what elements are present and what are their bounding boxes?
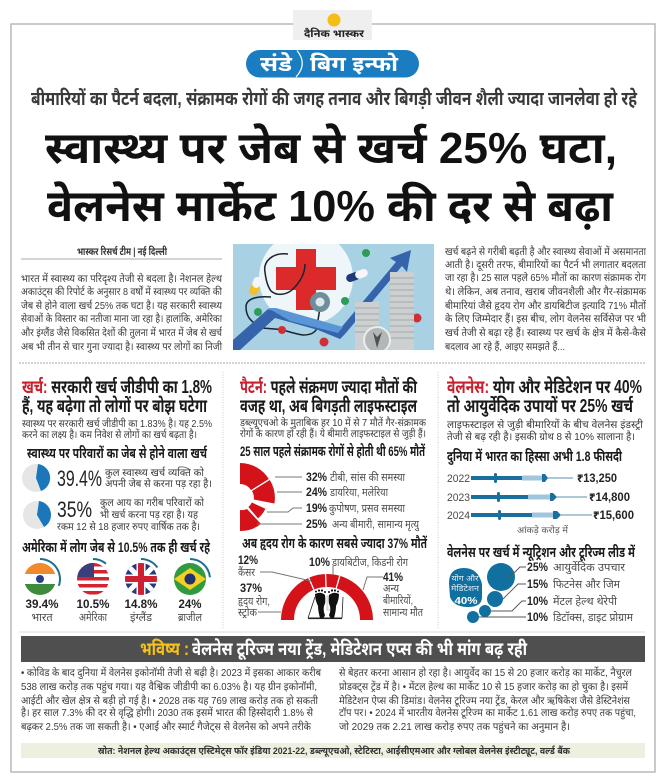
syringe chart: 2023: 2023: [447, 492, 470, 504]
bubble chart: wellness spending: 15%: [527, 577, 548, 591]
fan chart: causes 25 years ago: 32%: [306, 470, 327, 484]
pie chart: 39.4 percent: कुल स्वास्थ्य खर्च व्यक्ति को: [105, 466, 204, 479]
future text left column: 538 लाख करोड़ तक पहुंच गया। यह वैश्विक जीडीपी का 6.03% है। यह ग्रीन इकोनॉमी,: [21, 680, 317, 694]
syringe chart: 2024: ₹15,600: [593, 508, 634, 522]
bubble chart: wellness spending: 10%: [527, 610, 548, 624]
intro text left: सेवाओं के विस्तार का नतीजा माना जा रहा है। हालांकि, अमेरिका: [21, 312, 222, 325]
icon: Brazil flag: ब्राजील: [178, 611, 202, 624]
fan chart: causes 25 years ago: 25%: [306, 517, 327, 531]
intro text left: जेब से होने वाला खर्च 25% तक घटा है। यह सरकारी स्वास्थ्य: [21, 299, 223, 312]
subheading: household spending: स्वास्थ्य पर परिवारों का जेब से होने वाला खर्च: [27, 444, 208, 461]
fan chart: causes 25 years ago: [240, 463, 420, 531]
pie chart: 35 percent: रकम 12 से 18 हजार रुपए वार्षिक तक है।: [57, 520, 200, 533]
bubble chart: wellness spending: योग और: [452, 574, 479, 583]
future text right column: जो 2029 तक 2.21 लाख करोड़ रुपए तक पहुंचने का अनुमान है।: [339, 720, 570, 734]
semi-donut chart: causes now: कैंसर: [238, 566, 255, 579]
icon: stethoscope: [246, 254, 320, 335]
semi-donut chart: causes now: 37%: [240, 581, 262, 595]
section badge: बिग इन्फो: [310, 52, 399, 76]
bubble chart: wellness spending: [449, 560, 633, 624]
bubble chart: wellness spending: 40%: [454, 596, 478, 607]
syringe chart: 2024: [447, 508, 634, 522]
intro text right: थे। लेकिन, अब तनाव, खराब जीवनशैली और गैर-संक्रामक: [445, 285, 647, 298]
source bar: स्रोत: नेशनल हेल्थ अकाउंट्स एस्टिमेट्स फॉर इंडिया 2021-22, डब्ल्यूएचओ, स्टेटिस्टा, आईसीएमआर और ग्लोबल वेलनेस इंस्टीट्यूट, वर्ल्ड बैंक: [98, 744, 571, 757]
spending summary: [22, 417, 212, 441]
fan chart: causes 25 years ago: 24%: [306, 485, 327, 499]
syringe chart: 2024: 2024: [447, 510, 470, 522]
future text right column: से बेहतर करना आसान हो रहा है। आयुर्वेद का 15 से 20 हजार करोड़ का मार्केट, नैचुरल: [339, 666, 633, 679]
pie chart: 35 percent: 35%: [57, 497, 92, 522]
panel: spending: [22, 376, 212, 624]
future text right column: [339, 666, 636, 734]
section badge: संडे: [260, 52, 293, 76]
fan chart: causes 25 years ago: अन्य बीमारी, सामान्य मृत्यु: [332, 518, 420, 531]
syringe chart: 2022: ₹13,250: [577, 471, 617, 485]
intro text right: [445, 245, 647, 353]
wellness summary: लाइफस्टाइल से जुड़ी बीमारियों के बीच वेलनेस इंडस्ट्री: [447, 418, 643, 431]
main title: स्वास्थ्य पर जेब से खर्च 25% घटा,: [45, 122, 617, 173]
icon: coin stacks: [355, 272, 414, 353]
future text left column: बढ़कर 2.5% तक जा सकती है। • एआई और स्मार्ट गैजेट्स से वेलनेस को अपने तरीके: [21, 720, 312, 733]
heading: spending: [22, 376, 212, 416]
semi-donut chart: causes now: [238, 553, 424, 620]
pie chart: 39.4 percent: अपनी जेब से करना पड़ रहा है।: [105, 477, 212, 490]
icon: India flag: भारत: [31, 612, 53, 624]
future text left column: आईटी और खेल क्षेत्र से बड़ी हो गई है। • 2028 तक यह 769 लाख करोड़ तक हो सकती: [21, 694, 318, 707]
main title: [45, 122, 617, 231]
future text left column: [21, 666, 322, 733]
icon: pills: [248, 268, 369, 296]
wellness summary: [447, 418, 643, 443]
intro text left: भारत में स्वास्थ्य का परिदृश्य तेजी से बदला है। नेशनल हेल्थ: [21, 272, 222, 285]
bubble chart: wellness spending: मेडिटेशन: [451, 584, 480, 593]
pattern summary: [239, 416, 427, 440]
icon: USA flag: [76, 559, 110, 624]
icon: UK flag: 14.8%: [124, 597, 158, 611]
fan chart: causes 25 years ago: कुपोषण, प्रसव समस्या: [329, 502, 405, 515]
intro text right: बीमारियां जैसे हृदय रोग और डायबिटीज इत्यादि 71% मौतों: [445, 299, 646, 312]
semi-donut chart: causes now: 10%: [309, 555, 330, 569]
bubble chart: wellness spending: 25%: [527, 560, 548, 574]
semi-donut chart: causes now: बीमारियों,: [383, 594, 413, 607]
syringe chart: 2023: [447, 490, 630, 504]
section badge: [246, 50, 419, 78]
heading: pattern: वजह था, अब बिगड़ती लाइफस्टाइल: [240, 396, 418, 416]
future text right column: प्रोडक्ट्स ट्रेंड में है। • मेंटल हेल्थ का मार्केट 10 से 15 हजार करोड़ का हो चुका है। इसमें: [339, 680, 629, 693]
subheading: infectious deaths: 25 साल पहले संक्रामक रोगों से होती थी 65% मौतें: [240, 442, 426, 459]
syringe chart: 2022: [447, 471, 617, 485]
chart note: आंकड़े करोड़ में: [517, 524, 569, 536]
semi-donut chart: causes now: हृदय रोग,: [238, 595, 270, 608]
pattern summary: रोगों के कारण हो रही हैं। ये बीमारी लाइफस्टाइल से जुड़ी हैं।: [240, 427, 426, 440]
icon: Brazil flag: 24%: [178, 597, 202, 611]
icon: USA flag: 10.5%: [76, 597, 110, 611]
future text right column: टॉप पर। • 2024 में भारतीय वेलनेस टूरिज्म का मार्केट 1.61 लाख करोड़ रुपए तक पहुंचा,: [339, 706, 636, 720]
semi-donut chart: causes now: 41%: [383, 570, 403, 584]
intro text right: बदलाव आ रहे हैं, आइए समझते हैं...: [445, 340, 565, 353]
panel: pattern: [238, 376, 428, 620]
future text right column: मेडिटेशन ऐप्स की डिमांड। वेलनेस टूरिज्म नया ट्रेंड, केरल और ऋषिकेश जैसे डेस्टिनेशंस: [339, 694, 631, 708]
source bar: [21, 743, 645, 758]
subheading: America comparison: अमेरिका में लोग जेब से 10.5% तक ही खर्च रहे: [22, 538, 211, 555]
bubble chart: wellness spending: मेंटल हेल्थ थेरेपी: [553, 595, 617, 608]
bubble chart: wellness spending: डिटॉक्स, डाइट प्रोग्राम: [553, 611, 633, 624]
pie chart: 35 percent: भी खर्च करना पड़ रहा है। यह: [100, 508, 198, 521]
semi-donut chart: causes now: 12%: [238, 553, 258, 567]
bubble chart: wellness spending: 10%: [527, 594, 548, 608]
bubble chart: wellness spending: फिटनेस और जिम: [553, 578, 620, 591]
illustration: health and money: [233, 244, 434, 350]
icon: UK flag: इंग्लैंड: [130, 611, 152, 624]
intro text right: के लिए जिम्मेदार हैं। इस बीच, लोग वेलनेस सर्विसेज पर भी: [445, 312, 646, 325]
icon: UK flag: [124, 559, 158, 624]
spending summary: स्वास्थ्य पर सरकारी खर्च जीडीपी का 1.83% है। यह 2.5%: [22, 417, 212, 430]
wellness summary: तेजी से बढ़ रही है। इसकी ग्रोथ 8 से 10% सालाना है।: [447, 430, 635, 443]
subheading: heart disease deaths: अब हृदय रोग के कारण सबसे ज्यादा 37% मौतें: [242, 534, 428, 551]
heading: wellness: [447, 377, 642, 417]
spending summary: करने का लक्ष्य है। कम निवेश से लोगों का खर्च बढ़ता है।: [22, 428, 197, 441]
semi-donut chart: causes now: डायबिटीज, किडनी रोग: [331, 556, 409, 569]
masthead logo: [293, 10, 372, 40]
intro text right: आती है। दूसरी तरफ, बीमारियों का पैटर्न भी लगातार बदलता: [445, 258, 646, 272]
pie chart: 39.4 percent: 39.4%: [57, 466, 102, 491]
fan chart: causes 25 years ago: टीबी, सांस की समस्या: [330, 471, 405, 484]
intro text left: अकाउंट्स की रिपोर्ट के अनुसार 8 वर्षों में स्वास्थ्य पर व्यक्ति की: [21, 285, 222, 298]
pattern summary: डब्ल्यूएचओ के मुताबिक हर 10 में से 7 मौतें गैर-संक्रामक: [239, 416, 427, 430]
heading: pattern: पैटर्न: पहले संक्रमण ज्यादा मौतों की: [240, 376, 417, 397]
pie chart: 39.4 percent: [22, 464, 212, 492]
intro text left: और इंग्लैंड जैसे विकसित देशों की तुलना में भारत में जेब से खर्च: [21, 326, 223, 339]
intro text left: [21, 272, 223, 353]
syringe chart: 2023: ₹14,800: [589, 490, 630, 504]
icon: India flag: 39.4%: [26, 597, 59, 611]
semi-donut chart: causes now: अन्य: [383, 583, 400, 595]
icon: rising arrow: [233, 250, 411, 350]
heading: spending: खर्च: सरकारी खर्च जीडीपी का 1.8%: [22, 376, 212, 397]
future text left column: • कोविड के बाद दुनिया में वेलनेस इकोनॉमी तेजी से बढ़ी है। 2023 में इसका आकार करीब: [21, 666, 322, 680]
pie chart: 35 percent: कुल आय का गरीब परिवारों को: [100, 496, 204, 509]
future text left column: है। हर साल 7.3% की दर से वृद्धि होगी। 2030 तक इसमें भारत की हिस्सेदारी 1.8% से: [21, 706, 314, 719]
pie chart: 35 percent: [23, 496, 204, 533]
banner: future: [21, 636, 645, 662]
intro text right: खर्च तेजी से बढ़ा रहे हैं। स्वास्थ्य पर खर्च के क्षेत्र में कैसे-कैसे: [445, 326, 647, 339]
semi-donut chart: causes now: स्ट्रोक: [238, 606, 257, 619]
banner: future: वेलनेस टूरिज्म नया ट्रेंड, मेडिटेशन एप्स की भी मांग बढ़ रही: [192, 638, 528, 661]
fan chart: causes 25 years ago: डायरिया, मलेरिया: [329, 486, 388, 499]
byline: भास्कर रिसर्च टीम | नई दिल्ली: [77, 246, 168, 258]
heading: pattern: [240, 376, 418, 416]
masthead logo: दैनिक भास्कर: [304, 28, 365, 40]
bubble chart: wellness spending: आयुर्वेदिक उपचार: [553, 561, 626, 574]
icon: dots: [254, 249, 422, 346]
syringe chart: 2022: 2022: [447, 473, 470, 485]
heading: spending: हैं, यह बढ़ेगा तो लोगों पर बोझ घटेगा: [22, 395, 208, 416]
icon: footprints: [308, 589, 343, 619]
panel: wellness: [447, 377, 643, 624]
icon: red cross: [276, 249, 336, 310]
fan chart: causes 25 years ago: 19%: [306, 501, 327, 515]
icon: USA flag: अमेरिका: [79, 611, 107, 624]
icon: India flag: [24, 559, 60, 624]
banner: future: भविष्य :: [140, 639, 189, 659]
intro text left: अब भी तीन से चार गुना ज्यादा है। स्वास्थ्य पर लोगों का निजी: [21, 340, 222, 353]
main title: वेलनेस मार्केट 10% की दर से बढ़ा: [47, 180, 614, 231]
semi-donut chart: causes now: सामान्य मौत: [383, 606, 424, 619]
icon: Brazil flag: [174, 559, 210, 624]
